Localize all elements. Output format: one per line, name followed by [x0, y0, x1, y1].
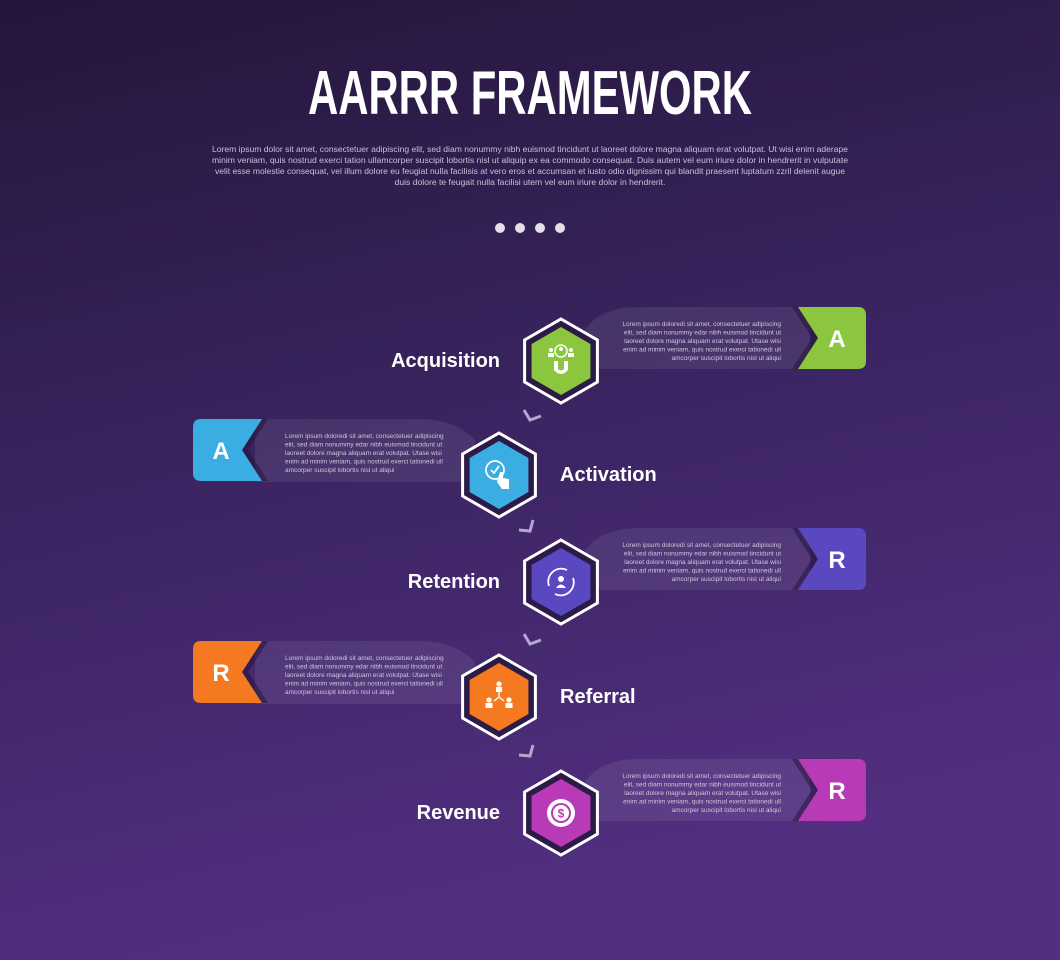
- card: acquisition: amcorper suscipit lobortis nisl ut aliqui: [672, 355, 781, 362]
- card: activation: [193, 419, 475, 482]
- labels: Retention: [408, 571, 500, 593]
- card: retention: R: [828, 547, 846, 574]
- card: retention: enim ad minim veniam, quis nostrud exerci tationedi ull: [623, 568, 782, 574]
- card: acquisition: laoreet dolore magna aliquam erat volutpat. Utase wisi: [624, 338, 781, 345]
- icon: magnet people: [548, 345, 574, 374]
- labels: Referral: [560, 686, 636, 708]
- card: acquisition: elit, sed diam nonummy edar nibh euismod tincidunt ut: [624, 330, 781, 336]
- card: retention: amcorper suscipit lobortis nisl ut aliqui: [672, 576, 781, 583]
- labels: Activation: [560, 464, 657, 486]
- card: activation: enim ad minim veniam, quis nostrud exerci tationedi ull: [285, 458, 443, 466]
- intro paragraph: minim veniam, quis nostrud exerci tation ullamcorper suscipit lobortis nisl ut aliquip ex ea commodo consequat. Duis autem vel eum iriure dolor in hendrerit in vulputate: [212, 155, 848, 165]
- card: referral: enim ad minim veniam, quis nostrud exerci tationedi ull: [285, 680, 443, 688]
- card: referral: [193, 641, 475, 704]
- card: activation: amcorper suscipit lobortis nisl ut aliqui: [285, 467, 394, 474]
- card: referral: Lorem ipsum doloredi sit amet, consectetuer adipiscing: [285, 655, 444, 662]
- card: retention: elit, sed diam nonummy edar nibh euismod tincidunt ut: [624, 550, 781, 558]
- labels: Acquisition: [391, 350, 500, 372]
- arrows between steps: [519, 410, 541, 756]
- icon: rotating person: [548, 569, 574, 595]
- hexagon: revenue: [525, 771, 597, 855]
- card: referral: amcorper suscipit lobortis nisl ut aliqui: [285, 689, 394, 696]
- card: revenue: [585, 759, 866, 821]
- card: referral: R: [212, 660, 230, 687]
- intro paragraph: [212, 144, 848, 187]
- card: activation: Lorem ipsum doloredi sit amet, consectetuer adipiscing: [285, 433, 444, 440]
- hexagon: acquisition: [525, 319, 597, 403]
- card: activation: laoreet dolore magna aliquam erat volutpat. Utase wisi: [285, 450, 442, 457]
- card: revenue: amcorper suscipit lobortis nisl ut aliqui: [672, 807, 781, 814]
- card: referral: elit, sed diam nonummy edar nibh euismod tincidunt ut: [285, 664, 442, 670]
- card: acquisition: enim ad minim veniam, quis nostrud exerci tationedi ull: [623, 346, 782, 354]
- card: revenue: elit, sed diam nonummy edar nibh euismod tincidunt ut: [624, 782, 781, 788]
- card: activation: elit, sed diam nonummy edar nibh euismod tincidunt ut: [285, 442, 442, 448]
- icon: touch check: [486, 461, 509, 489]
- hexagon: activation: [463, 433, 535, 517]
- hexagon: retention: [525, 540, 597, 624]
- intro paragraph: Lorem ipsum dolor sit amet, consectetuer adipiscing elit, sed diam nonummy nibh euismod tincidunt ut laoreet dolore magna aliquam erat volutpat. Ut wisi enim aderape: [212, 144, 848, 154]
- pagination dots: [495, 223, 565, 233]
- card: acquisition: A: [828, 326, 846, 353]
- card: retention: [585, 528, 866, 590]
- card: referral: laoreet dolore magna aliquam erat volutpat. Utase wisi: [285, 672, 442, 679]
- card: revenue: enim ad minim veniam, quis nostrud exerci tationedi ull: [623, 798, 782, 806]
- labels: Revenue: [417, 802, 500, 824]
- card: acquisition: [585, 307, 866, 369]
- card: retention: Lorem ipsum doloredi sit amet, consectetuer adipiscing: [622, 542, 781, 549]
- title: AARRR FRAMEWORK: [308, 59, 752, 128]
- card: activation: A: [212, 438, 230, 465]
- icon: coin: $: [558, 806, 565, 820]
- card: revenue: laoreet dolore magna aliquam erat volutpat. Utase wisi: [624, 790, 781, 797]
- icon: network people: [486, 681, 512, 708]
- card: acquisition: Lorem ipsum doloredi sit amet, consectetuer adipiscing: [622, 321, 781, 328]
- labels: [391, 350, 657, 824]
- intro paragraph: velit esse molestie consequat, vel illum dolore eu feugiat nulla facilisis at vero eros et accumsan et iusto odio dignissim qui blandit praesent luptatum zzril delenit augue: [215, 166, 845, 176]
- hexagon: referral: [463, 655, 535, 739]
- card: revenue: R: [828, 778, 846, 805]
- intro paragraph: duis dolore te feugait nulla facilisi utem vel eum iriure dolor in hendrerit.: [395, 177, 665, 187]
- card: revenue: Lorem ipsum doloredi sit amet, consectetuer adipiscing: [622, 773, 781, 780]
- card: retention: laoreet dolore magna aliquam erat volutpat. Utase wisi: [624, 559, 781, 566]
